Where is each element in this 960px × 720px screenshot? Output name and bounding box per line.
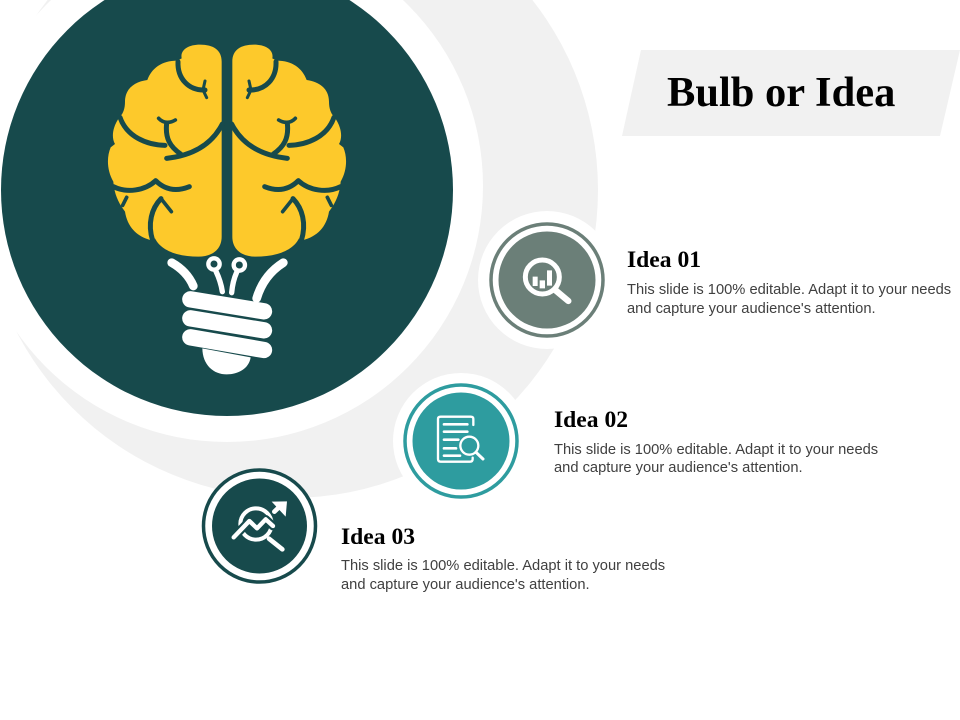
idea 01 text: Idea 01 (627, 247, 701, 273)
icon: magnifier with rising arrow (234, 501, 287, 549)
idea 02 badge (393, 373, 529, 509)
idea 02 text (554, 407, 878, 476)
icon: brain (108, 45, 346, 257)
idea 02 text: Idea 02 (554, 407, 628, 433)
icon: document with magnifier (438, 417, 483, 462)
idea 01 text: This slide is 100% editable. Adapt it to your needs (627, 282, 951, 298)
title: Bulb or Idea (667, 69, 895, 116)
idea 03 text: and capture your audience's attention. (341, 577, 590, 593)
icon: bulb base and filaments (172, 258, 283, 374)
idea 01 text: and capture your audience's attention. (627, 301, 876, 317)
idea 03 text: This slide is 100% editable. Adapt it to your needs (341, 558, 665, 574)
idea 01 text (627, 247, 951, 317)
idea 03 text: Idea 03 (341, 524, 415, 550)
main dark circle (1, 0, 453, 416)
white ring around main circle (0, 0, 483, 442)
background grey arc (0, 0, 598, 498)
idea 02 text: This slide is 100% editable. Adapt it to your needs (554, 442, 878, 458)
title band (622, 50, 960, 136)
idea 02 text: and capture your audience's attention. (554, 460, 803, 476)
idea 03 text (341, 524, 665, 593)
idea 03 badge (204, 470, 316, 582)
icon: magnifier with bars (525, 260, 568, 301)
idea 01 badge (478, 211, 616, 349)
